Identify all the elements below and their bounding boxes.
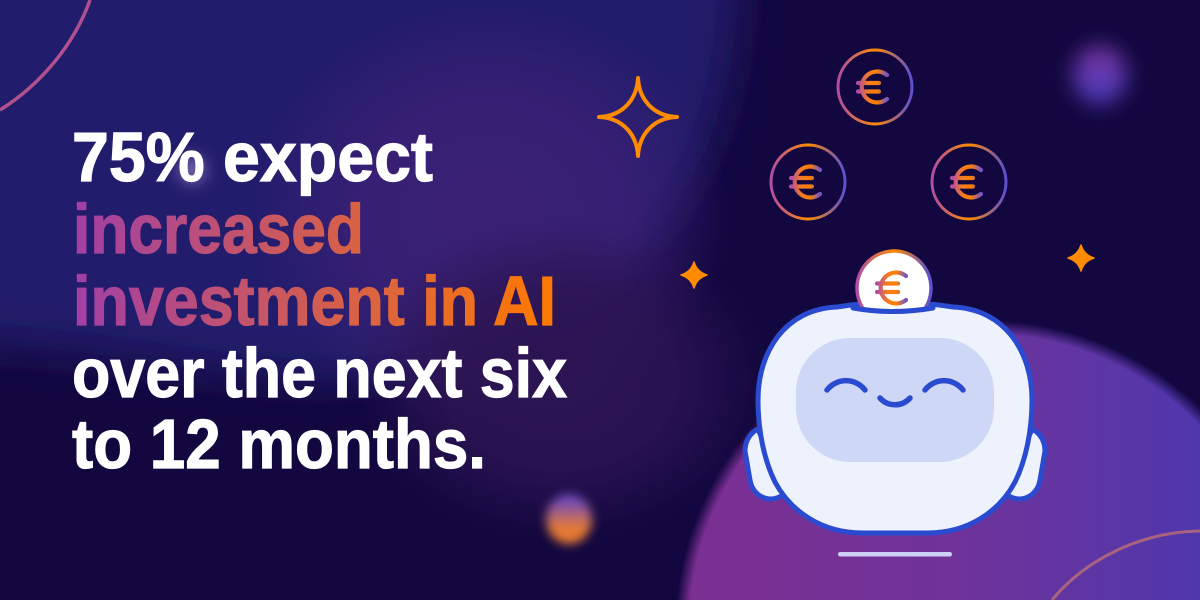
icon: euro coin right [932, 145, 1006, 219]
icon: large sparkle outline [599, 78, 677, 156]
headline: over the next six [72, 334, 567, 412]
headline [72, 118, 567, 483]
orb: top right [1073, 46, 1127, 104]
left eye [827, 381, 865, 390]
orb: bottom centre [546, 494, 592, 544]
face screen [796, 338, 994, 462]
headline: investment in AI [73, 262, 556, 340]
shadow line under robot [838, 552, 952, 556]
slot lip [853, 308, 933, 312]
icon: small sparkle left [681, 262, 707, 288]
coin entering slot [855, 249, 933, 309]
icon: euro coin top [838, 50, 912, 124]
smile [880, 398, 910, 405]
arc: top left [0, 0, 90, 110]
icon: small sparkle right [1068, 245, 1094, 271]
headline: to 12 months. [72, 405, 486, 483]
headline: 75% expect [72, 118, 433, 196]
arc: bottom right [1052, 531, 1200, 600]
icon: euro coin left [771, 145, 845, 219]
right eye [925, 381, 963, 390]
left ear [745, 429, 785, 499]
robot piggy bank [745, 251, 1045, 533]
headline: increased [73, 190, 364, 268]
body [758, 302, 1032, 533]
right ear [1005, 429, 1045, 499]
glow behind percent sign [178, 156, 206, 184]
